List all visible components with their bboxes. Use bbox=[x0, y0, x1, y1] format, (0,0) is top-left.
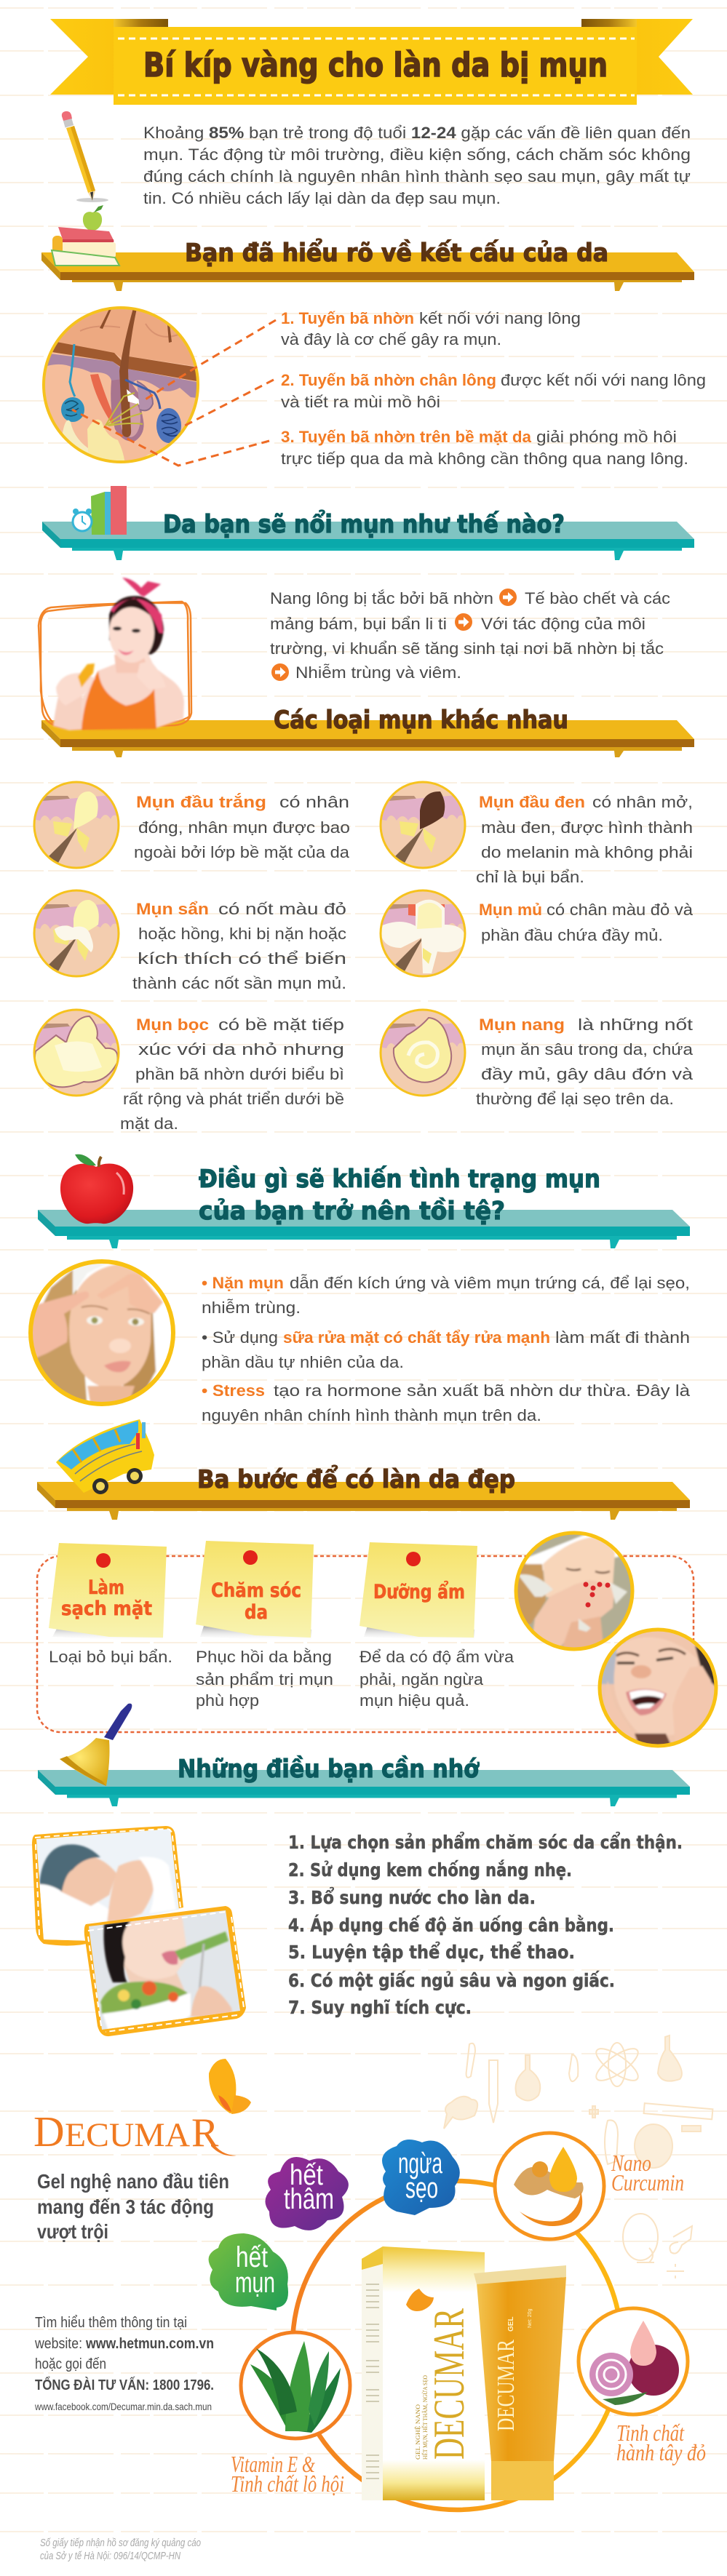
tagline: mang đến 3 tác động bbox=[37, 2196, 214, 2218]
checklist: 2. Sử dụng kem chống nắng nhẹ. bbox=[288, 1859, 572, 1881]
doodles background bbox=[444, 2035, 712, 2278]
badge: ngừa sẹo: ngừa bbox=[398, 2148, 442, 2180]
product: Decumar tube: Net: 20g bbox=[528, 2308, 533, 2328]
icon: clock and binders bbox=[73, 486, 127, 535]
icon: books and apple bbox=[52, 205, 119, 266]
acne type: nodule bbox=[33, 1010, 344, 1133]
callout lines bbox=[72, 320, 276, 466]
label: curcumin: Curcumin bbox=[611, 2169, 684, 2196]
icon: arrow bbox=[455, 613, 472, 631]
step 3: mụn hiệu quả. bbox=[359, 1691, 469, 1710]
badge: hết mụn: mụn bbox=[235, 2267, 275, 2299]
product: Decumar box: GEL NGHỆ NANO bbox=[414, 2404, 421, 2460]
logo: Decumar: ECUMA bbox=[65, 2116, 190, 2154]
step 2: Phục hồi da bằng bbox=[196, 1648, 332, 1666]
tagline bbox=[37, 2170, 229, 2243]
heading: what worsens acne: của bạn trở nên tồi tệ? bbox=[199, 1197, 505, 1226]
badge: ngừa sẹo: sẹo bbox=[405, 2172, 438, 2204]
step 3: phải, ngăn ngừa bbox=[359, 1670, 484, 1688]
label: aloe: Vitamin E & bbox=[231, 2451, 315, 2477]
item 1 bbox=[281, 309, 581, 348]
logo: Decumar: D bbox=[33, 2108, 65, 2156]
checklist bbox=[288, 1831, 683, 2018]
product: Decumar box bbox=[362, 2246, 485, 2500]
product: Decumar box: DECUMAR bbox=[425, 2308, 473, 2460]
contact info: www.facebook.com/Decumar.min.da.sach.mun bbox=[34, 2401, 212, 2412]
worsening causes text: • Nặn mụn bbox=[202, 1274, 284, 1292]
label: curcumin: Nano bbox=[611, 2150, 651, 2176]
icon: nodule bbox=[33, 1010, 120, 1096]
item 1: 1. Tuyến bã nhờn bbox=[281, 309, 414, 327]
badge: hết thâm: thâm bbox=[284, 2183, 334, 2215]
photo: woman squeezing pimple bbox=[28, 1259, 182, 1411]
contact info bbox=[34, 2315, 214, 2412]
heading: skin structure: Bạn đã hiểu rõ về kết cấu của da bbox=[185, 238, 608, 268]
photo: woman eating salad bbox=[84, 1906, 246, 2036]
acne type: blackhead: do melanin mà không phải bbox=[481, 843, 693, 861]
acne type: whitehead: có nhân bbox=[279, 793, 349, 811]
icon: pencil bbox=[62, 111, 108, 202]
acne type: nodule: xúc với da nhỏ nhưng bbox=[138, 1040, 344, 1058]
sticky note 2 bbox=[196, 1541, 314, 1641]
step 3: Để da có độ ẩm vừa bbox=[359, 1648, 515, 1666]
shelf: teal 6 bbox=[38, 1770, 690, 1806]
photo: sleeping woman bbox=[32, 1826, 183, 1946]
item 1: và đây là cơ chế gây ra mụn. bbox=[281, 330, 501, 348]
label: onion bbox=[616, 2420, 706, 2465]
acne type: pustule bbox=[379, 890, 694, 976]
icon: butterfly bbox=[209, 2059, 251, 2114]
acne text: Nhiễm trùng và viêm. bbox=[295, 663, 461, 682]
footer note bbox=[40, 2537, 201, 2562]
sticky note 2: Chăm sóc bbox=[211, 1579, 301, 1602]
item 2: được kết nối với nang lông bbox=[501, 371, 706, 389]
footer note: Số giấy tiếp nhận hồ sơ đăng ký quảng cáo bbox=[40, 2537, 201, 2549]
diagram: skin cross-section bbox=[42, 306, 199, 463]
shelf: teal 2 bbox=[42, 522, 694, 560]
acne type: papule: Mụn sẩn bbox=[136, 900, 209, 918]
heading: what worsens acne: Điều gì sẽ khiến tình trạng mụn bbox=[199, 1165, 600, 1194]
skin gland list bbox=[281, 309, 706, 468]
acne text: Tế bào chết và các bbox=[525, 589, 670, 607]
acne text: trường, vi khuẩn sẽ tăng sinh tại nơi bã nhờn bị tắc bbox=[270, 639, 664, 658]
contact info: TỔNG ĐÀI TƯ VẤN: 1800 1796. bbox=[35, 2376, 214, 2393]
acne type: cyst: Mụn nang bbox=[479, 1016, 565, 1034]
intro text bbox=[143, 124, 691, 207]
icon: whitehead bbox=[33, 782, 120, 868]
badge: hết thâm bbox=[265, 2157, 349, 2230]
acne type: pustule: phần đầu chứa đầy mủ. bbox=[481, 926, 663, 944]
acne type: papule: kích thích có thể biến bbox=[138, 949, 346, 968]
label: aloe: Tinh chất lô hội bbox=[231, 2471, 344, 2497]
acne type: nodule: rất rộng và phát triển dưới bề bbox=[123, 1090, 344, 1108]
intro text: mụn. Tác động từ môi trường, điều kiện sống, cách chăm sóc không bbox=[143, 145, 691, 164]
acne type: pustule: có chân màu đỏ và bbox=[547, 901, 694, 919]
shelf: yellow 1 bbox=[41, 252, 694, 291]
product: Decumar tube bbox=[474, 2265, 566, 2500]
contact info: website: bbox=[34, 2336, 82, 2352]
heading: things to remember: Những điều bạn cần nhớ bbox=[178, 1755, 480, 1784]
checklist: 3. Bổ sung nước cho làn da. bbox=[288, 1886, 536, 1908]
checklist: 6. Có một giấc ngủ sâu và ngon giấc. bbox=[288, 1970, 615, 1991]
shelf: yellow 5 bbox=[37, 1482, 690, 1520]
title ribbon bbox=[50, 19, 693, 105]
icon: arrow bbox=[499, 589, 517, 606]
acne type: cyst: thường để lại sẹo trên da. bbox=[476, 1090, 674, 1108]
product: Decumar tube: GEL bbox=[507, 2316, 515, 2332]
heading: acne types: Các loại mụn khác nhau bbox=[274, 706, 568, 735]
ingredient ring bbox=[293, 2181, 621, 2510]
acne type: whitehead: Mụn đầu trắng bbox=[136, 793, 266, 811]
icon: papule bbox=[33, 890, 120, 976]
acne type: whitehead: ngoài bởi lớp bề mặt của da bbox=[134, 843, 350, 861]
item 3: 3. Tuyến bã nhờn trên bề mặt da bbox=[281, 428, 531, 446]
logo: Decumar: R bbox=[191, 2110, 219, 2156]
icon: pustule bbox=[379, 890, 466, 976]
badge: hết mụn: hết bbox=[236, 2241, 268, 2273]
icon: cyst bbox=[379, 1010, 466, 1096]
intro text: tin. Có nhiều cách lấy lại dàn da đẹp sau mụn. bbox=[143, 189, 501, 207]
acne type: whitehead: đóng, nhân mụn được bao bbox=[138, 818, 350, 837]
acne type: nodule: có bề mặt tiếp bbox=[218, 1016, 344, 1034]
contact info: Tìm hiểu thêm thông tin tại bbox=[35, 2315, 187, 2331]
acne type: blackhead: màu đen, được hình thành bbox=[481, 818, 693, 837]
acne type: whitehead bbox=[33, 782, 350, 868]
acne type: blackhead: Mụn đầu đen bbox=[479, 793, 585, 811]
intro text: Khoảng 85% bạn trẻ trong độ tuổi 12-24 gặp các vấn đề liên quan đến bbox=[143, 124, 691, 142]
badge: hết thâm: hết bbox=[290, 2159, 323, 2191]
worsening causes text bbox=[202, 1274, 691, 1424]
worsening causes text: làm mất đi thành bbox=[555, 1328, 690, 1347]
worsening causes text: • Stress bbox=[202, 1381, 265, 1400]
step 1 bbox=[49, 1543, 172, 1666]
acne type: cyst: là những nốt bbox=[578, 1016, 694, 1034]
contact info: www.hetmun.com.vn bbox=[85, 2336, 214, 2352]
intro text: đúng cách chính là nguyên nhân hình thành sẹo sau mụn, gây mất tự bbox=[143, 167, 691, 186]
tagline: Gel nghệ nano đầu tiên bbox=[37, 2170, 229, 2193]
item 2: 2. Tuyến bã nhờn chân lông bbox=[281, 371, 496, 389]
acne type: pustule: Mụn mủ bbox=[479, 901, 542, 919]
ingredient: onion bbox=[579, 2308, 688, 2414]
title: Bí kíp vàng cho làn da bị mụn bbox=[143, 46, 608, 84]
sticky note 2: da bbox=[245, 1601, 268, 1624]
acne type: cyst: đầy mủ, gây dâu đớn và bbox=[481, 1065, 694, 1083]
acne type: nodule: Mụn bọc bbox=[136, 1016, 209, 1034]
worsening causes text: nguyên nhân chính hình thành mụn trên da. bbox=[202, 1406, 541, 1424]
step 3 bbox=[359, 1542, 515, 1710]
label: curcumin bbox=[611, 2150, 684, 2196]
step 2: sản phẩm trị mụn bbox=[196, 1670, 333, 1688]
checklist: 5. Luyện tập thể dục, thể thao. bbox=[288, 1941, 575, 1963]
icon: red apple bbox=[60, 1155, 133, 1224]
sticky note 3: Dưỡng ẩm bbox=[373, 1579, 465, 1603]
acne type: papule: hoặc hồng, khi bị nặn hoặc bbox=[138, 925, 346, 943]
worsening causes text: tạo ra hormone sản xuất bã nhờn dư thừa. Đây là bbox=[274, 1381, 691, 1400]
acne type: blackhead: chỉ là bụi bẩn. bbox=[476, 868, 584, 886]
icon: golden bell bbox=[60, 1704, 132, 1786]
item 3: trực tiếp qua da mà không cần thông qua nang lông. bbox=[281, 450, 688, 468]
photo: girl in frame bbox=[39, 578, 191, 730]
worsening causes text: dẫn đến kích ứng và viêm mụn trứng cá, để lại sẹo, bbox=[290, 1274, 690, 1292]
acne type: cyst bbox=[379, 1010, 694, 1108]
item 3 bbox=[281, 428, 688, 468]
item 2 bbox=[281, 371, 706, 411]
ingredient: curcumin bbox=[495, 2133, 604, 2239]
step 2 bbox=[196, 1541, 333, 1710]
sticky note 1: sạch mặt bbox=[61, 1598, 152, 1620]
label: aloe bbox=[231, 2451, 344, 2497]
label: onion: Tinh chất bbox=[616, 2420, 685, 2446]
tagline: vượt trội bbox=[37, 2220, 108, 2243]
checklist: 7. Suy nghĩ tích cực. bbox=[288, 1997, 472, 2018]
shelf: teal 4 bbox=[38, 1210, 690, 1248]
contact info: hoặc gọi đến bbox=[35, 2356, 106, 2372]
label: onion: hành tây đỏ bbox=[616, 2439, 706, 2465]
acne type: cyst: mụn ăn sâu trong da, chứa bbox=[481, 1040, 694, 1058]
photo: laughing woman bbox=[597, 1626, 720, 1750]
acne type: nodule: phần bã nhờn dưới biểu bì bbox=[135, 1065, 344, 1083]
worsening causes text: sữa rửa mặt có chất tẩy rửa mạnh bbox=[283, 1328, 550, 1347]
worsening causes text: phần dầu tự nhiên của da. bbox=[202, 1353, 404, 1371]
acne type: papule: có nốt màu đỏ bbox=[218, 900, 346, 918]
icon: arrow bbox=[271, 663, 289, 681]
heading: three steps: Ba bước để có làn da đẹp bbox=[197, 1464, 515, 1494]
logo: Decumar bbox=[33, 2059, 251, 2156]
badge: hết mụn bbox=[209, 2233, 288, 2310]
sticky note 3 bbox=[359, 1542, 477, 1641]
acne type: blackhead bbox=[379, 782, 693, 886]
sticky note 1: Làm bbox=[88, 1576, 124, 1599]
ingredient: aloe bbox=[241, 2332, 350, 2439]
item 3: giải phóng mồ hôi bbox=[536, 428, 677, 446]
shelf: yellow 3 bbox=[41, 720, 694, 757]
acne text: Nang lông bị tắc bởi bã nhờn bbox=[270, 589, 493, 607]
worsening causes text: nhiễm trùng. bbox=[202, 1299, 301, 1317]
acne text: mảng bám, bụi bẩn li ti bbox=[270, 615, 447, 633]
badge: ngừa sẹo bbox=[382, 2140, 460, 2215]
step 1: Loại bỏ bụi bẩn. bbox=[49, 1648, 172, 1666]
acne type: blackhead: có nhân mở, bbox=[592, 793, 693, 811]
heading: how acne forms: Da bạn sẽ nổi mụn như thế nào? bbox=[163, 509, 565, 539]
step 2: phù hợp bbox=[196, 1691, 259, 1710]
panel: steps dashed frame bbox=[37, 1556, 694, 1732]
worsening causes text: • Sử dụng bbox=[202, 1328, 278, 1347]
acne type: papule bbox=[33, 890, 346, 992]
sticky note 1 bbox=[49, 1543, 167, 1641]
icon: school bus bbox=[56, 1419, 154, 1494]
checklist: 4. Áp dụng chế độ ăn uống cân bằng. bbox=[288, 1915, 614, 1936]
acne type: papule: thành các nốt sần mụn mủ. bbox=[132, 974, 346, 992]
item 1: kết nối với nang lông bbox=[419, 309, 581, 327]
product: Decumar box: HẾT MỤN, HẾT THÂM, NGỪA SẸO bbox=[421, 2375, 429, 2460]
icon: blackhead bbox=[379, 782, 466, 868]
acne text bbox=[270, 589, 670, 682]
acne text: Với tác động của môi bbox=[481, 615, 645, 633]
product: Decumar tube: DECUMAR bbox=[493, 2340, 520, 2431]
photo: washing face bbox=[514, 1531, 635, 1651]
item 2: và tiết ra mùi mồ hôi bbox=[281, 393, 440, 411]
acne type: nodule: mặt da. bbox=[120, 1114, 178, 1133]
heading: what worsens acne bbox=[199, 1165, 600, 1226]
footer note: của Sở y tế Hà Nội: 096/14/QCMP-HN bbox=[40, 2550, 180, 2562]
